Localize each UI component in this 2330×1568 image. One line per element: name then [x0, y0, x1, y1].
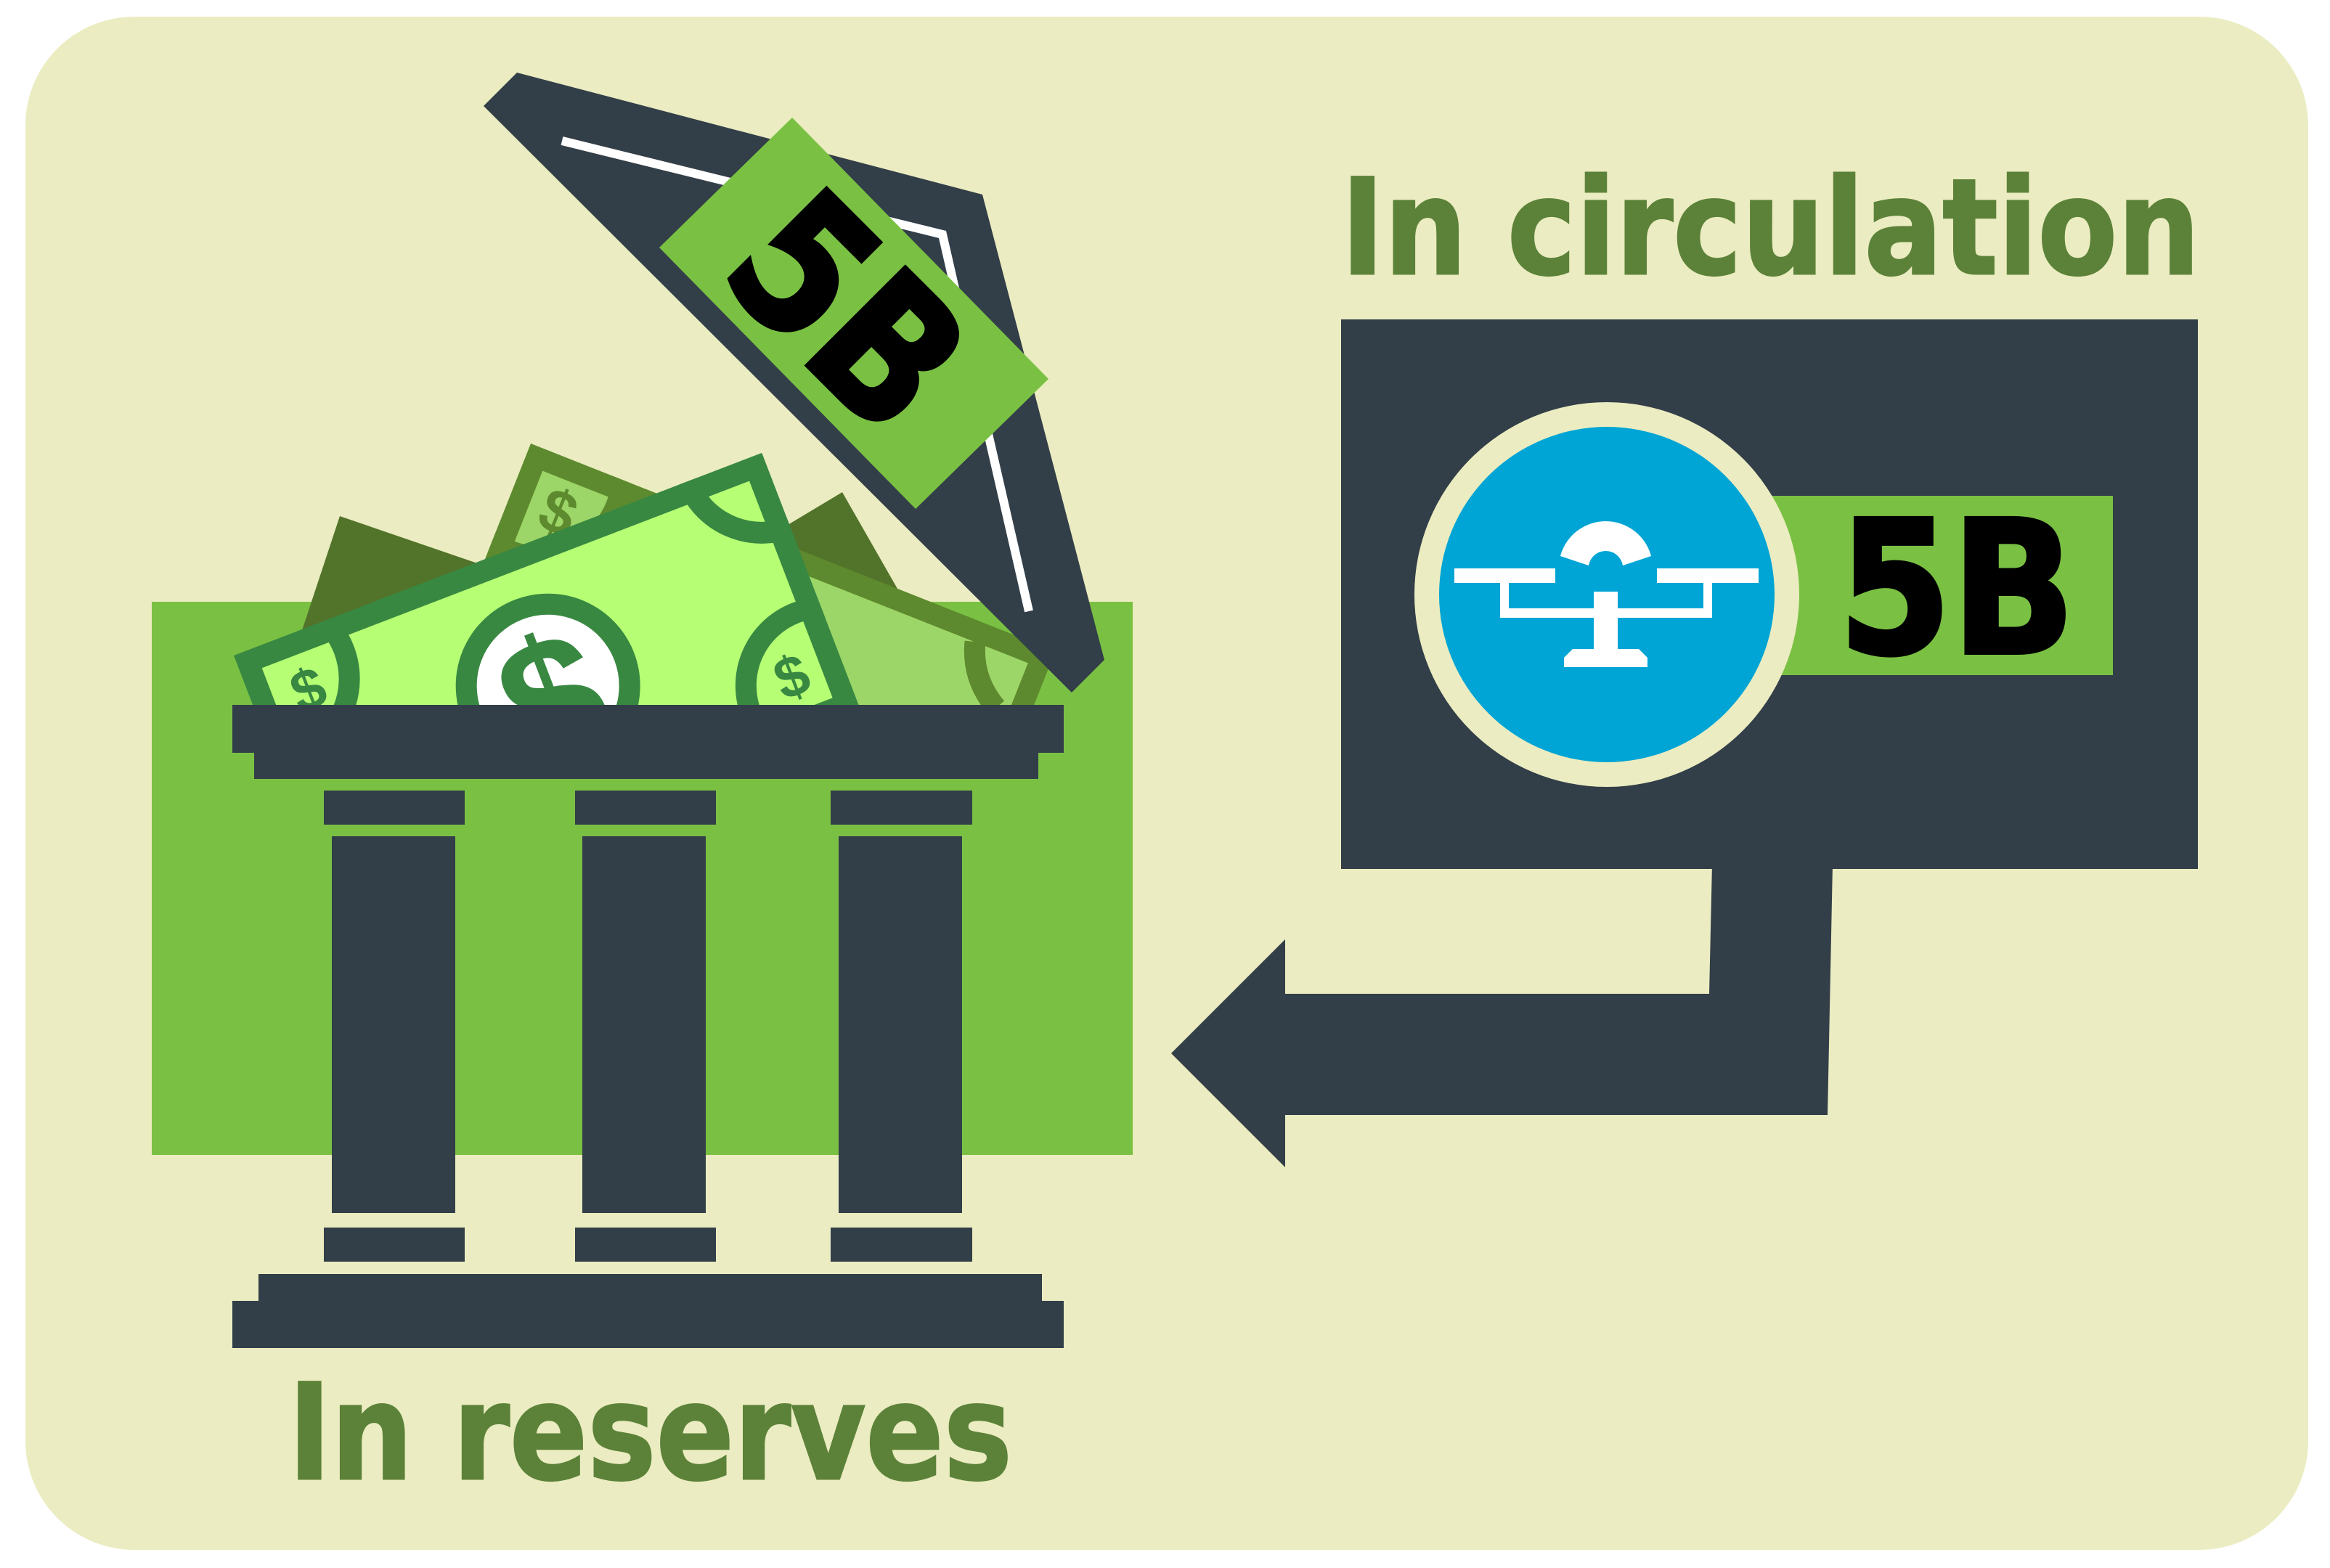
- arrow: circulation to reserves: [1171, 864, 1833, 1167]
- banknote: front bright green: $: [765, 641, 818, 713]
- heading: in reserves: In reserves: [288, 1356, 1012, 1511]
- banknote: front bright green: [234, 453, 858, 705]
- panel: circulation dark box: [1341, 319, 2198, 869]
- icon: balance scale in blue circle: [1414, 402, 1799, 787]
- rotated 5B tag: 5B: [684, 150, 1009, 475]
- value bar: 5B: [1670, 481, 2113, 696]
- value bar: 5B: 5B: [1838, 481, 2075, 696]
- banknote: back olive: [485, 444, 1048, 705]
- banknote: back olive: $: [529, 474, 587, 551]
- banknote: front bright green: $: [282, 653, 335, 725]
- banknote: far right dark: [755, 492, 918, 653]
- icon: bank building: [232, 705, 1064, 1348]
- icon: roof lid of bank: [484, 73, 1104, 693]
- banknote: front bright green: $: [473, 590, 633, 807]
- lid inner white line: [562, 141, 1029, 611]
- panel: reserves green block: [152, 602, 1133, 1155]
- heading: in circulation: In circulation: [1341, 151, 2200, 306]
- banknote: far left dark: [277, 516, 566, 705]
